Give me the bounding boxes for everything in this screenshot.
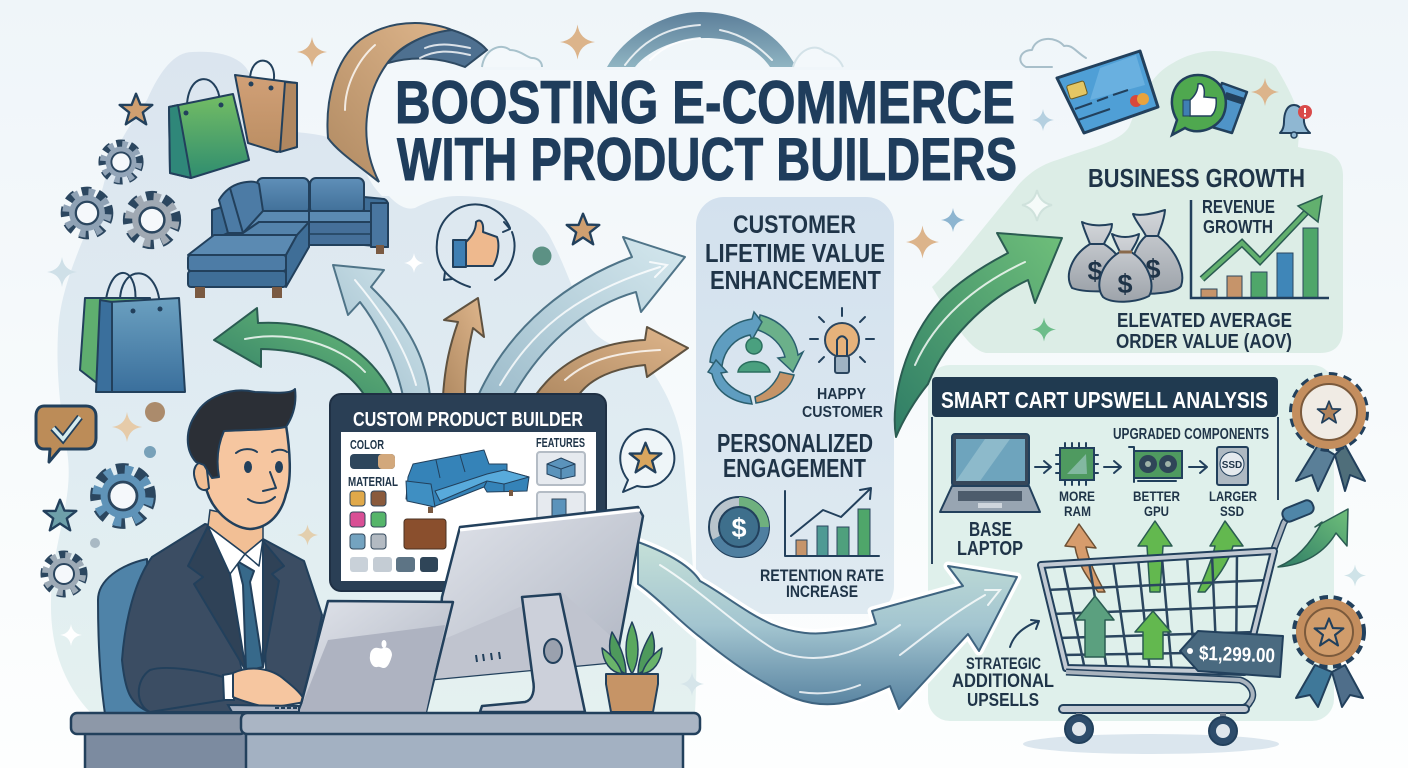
icon: money bags: $ — [1145, 254, 1161, 284]
sofa seats — [243, 211, 309, 233]
arm and hand — [139, 668, 225, 712]
icon: money bags: $ — [1117, 269, 1133, 299]
icon: ram chip — [1056, 443, 1098, 485]
label: revenue growth: GROWTH — [1203, 217, 1273, 237]
arrow: green left — [214, 308, 393, 396]
heading: custom product builder: CUSTOM PRODUCT BUILDER — [353, 409, 583, 431]
sparkle: white by thumb icon — [404, 253, 424, 273]
heading: customer lifetime value enhancement: LIFETIME VALUE — [705, 238, 885, 268]
flowing arrow: builder to cart — [638, 542, 1017, 709]
panel: customer lifetime value — [696, 197, 894, 614]
icon: big blue gear — [96, 469, 150, 523]
arrow: big green to business growth — [895, 233, 1062, 437]
label: more ram: MORE — [1059, 488, 1095, 504]
sparkle: white left of man — [60, 624, 82, 646]
label: better gpu — [1133, 488, 1180, 519]
suit — [122, 524, 322, 712]
material swatches — [350, 491, 446, 572]
label: upgraded components: UPGRADED COMPONENTS — [1113, 426, 1269, 443]
icon: star by thumb — [567, 214, 599, 244]
sparkle: outlined white — [1022, 190, 1052, 221]
decorative arch right — [607, 12, 796, 67]
lapels — [188, 526, 246, 671]
label: larger ssd: LARGER — [1209, 488, 1257, 504]
sparkle: blue near card — [1032, 109, 1054, 131]
sparkle: green — [1032, 318, 1056, 342]
label: larger ssd — [1209, 488, 1257, 519]
label: material: MATERIAL — [348, 474, 398, 489]
label: larger ssd: SSD — [1220, 503, 1244, 519]
icon: grey gear — [45, 555, 83, 593]
hair — [188, 389, 295, 478]
dot: blue — [144, 446, 156, 458]
color toggle — [350, 454, 395, 469]
ear — [194, 462, 209, 490]
price tag — [1180, 631, 1283, 677]
cloud outline near title left — [482, 47, 542, 67]
decorative arch left — [327, 23, 487, 182]
header bar — [932, 377, 1278, 417]
title: WITH PRODUCT BUILDERS — [397, 126, 1017, 193]
sparkle: right of cart — [1344, 564, 1366, 586]
heading: personalized engagement — [717, 428, 873, 483]
sofa middle seat — [214, 222, 309, 236]
arrow: tan right — [535, 327, 688, 396]
label: better gpu: BETTER — [1133, 488, 1180, 504]
feature box: accessory — [537, 492, 585, 522]
panel: smart cart background — [928, 365, 1334, 721]
icon: money bags: $ — [1087, 256, 1103, 286]
panel: smart cart upsell analysis — [932, 377, 1315, 754]
sparkle: tan left of man — [112, 412, 142, 442]
icon: green shopping bag — [169, 79, 249, 178]
arrow: tan up — [443, 298, 484, 396]
sofa back cushions — [257, 178, 309, 214]
label: revenue growth — [1202, 197, 1275, 237]
sparkle: tan centre right — [906, 226, 939, 258]
tie — [237, 561, 263, 671]
heading: smart cart upsell analysis: SMART CART UPSWELL ANALYSIS — [941, 387, 1268, 413]
icon: laptop — [228, 601, 453, 712]
icon: desk — [71, 713, 700, 768]
arrows rising out of cart — [1065, 521, 1243, 592]
sparkle: tan right of arch — [560, 24, 595, 60]
dot: tan — [145, 402, 165, 422]
sparkle: pale near plant — [680, 672, 704, 696]
heading: business growth: BUSINESS GROWTH — [1088, 163, 1305, 193]
arrow: laptop to ram — [1035, 461, 1051, 473]
title: BOOSTING E-COMMERCE — [395, 69, 1015, 136]
icon: dollar coin donut — [709, 497, 769, 557]
icon: dollar coin donut: $ — [731, 513, 747, 543]
icon: thumbs up speech bubble — [1172, 75, 1247, 135]
arrow: upsell pointer — [1010, 620, 1039, 647]
icon: teal star — [44, 500, 76, 530]
icon: bottom award rosette — [1296, 599, 1363, 707]
icon: blue and green shopping bags — [80, 273, 185, 392]
title — [395, 69, 1017, 193]
arrow: gpu to ssd — [1189, 461, 1207, 473]
label: strategic additional upsells — [952, 654, 1054, 710]
arrow: green right of cart — [1278, 509, 1348, 567]
icon: gears upper left — [66, 144, 176, 244]
icon: credit card — [1057, 51, 1158, 133]
label: base laptop: BASE — [969, 519, 1012, 541]
shirt collar — [208, 526, 263, 574]
label: retention rate increase: INCREASE — [786, 582, 858, 601]
label: strategic additional upsells: ADDITIONAL — [952, 671, 1054, 692]
icon: potted plant — [602, 622, 662, 712]
title halo — [358, 70, 1030, 196]
sparkle: tan top right — [1251, 78, 1279, 106]
icon: speech bubble with star — [620, 429, 674, 492]
label: strategic additional upsells: UPSELLS — [967, 690, 1039, 710]
figure: man in suit — [122, 389, 322, 712]
label: happy customer: HAPPY — [817, 386, 866, 403]
icon: ssd — [1217, 447, 1248, 485]
panel: custom product builder screen — [330, 394, 606, 591]
label: strategic additional upsells: STRATEGIC — [966, 654, 1041, 673]
heading: personalized engagement: ENGAGEMENT — [723, 453, 866, 483]
icon: top award rosette — [1293, 376, 1365, 491]
label: more ram: RAM — [1064, 503, 1091, 519]
icon: notification bell — [1280, 105, 1312, 138]
price tag: $1,299.00 — [1199, 643, 1275, 667]
label: happy customer — [802, 386, 883, 421]
sparkle: tan left of arch — [297, 37, 327, 67]
cloud outline top right — [1020, 39, 1086, 67]
icon: base laptop — [940, 434, 1040, 512]
sparkle: tan near screen — [297, 524, 318, 546]
icon: tan shopping bag — [235, 61, 297, 152]
arrow: ram to gpu — [1104, 461, 1121, 473]
label: more ram — [1059, 488, 1095, 519]
chart: retention rate — [785, 488, 879, 556]
icon: light bulb — [810, 308, 874, 373]
background blob: left scene — [51, 52, 696, 712]
label: elevated average order value: ELEVATED AVERAGE — [1117, 310, 1292, 332]
label: happy customer: CUSTOMER — [802, 404, 883, 421]
sofa right arm — [364, 197, 388, 247]
face — [203, 425, 290, 529]
label: elevated average order value: ORDER VALUE (AOV) — [1116, 331, 1292, 353]
icon: shopping cart — [1023, 499, 1315, 754]
heading: customer lifetime value enhancement: CUSTOMER — [733, 211, 856, 239]
label: base laptop — [957, 519, 1023, 560]
label: better gpu: GPU — [1144, 503, 1169, 519]
chart: revenue growth — [1191, 196, 1329, 298]
arrow: light blue up-left — [333, 265, 430, 396]
arrow: big light blue right — [478, 237, 685, 396]
icon: sectional sofa — [188, 178, 388, 298]
icon: gpu — [1129, 447, 1182, 482]
icon: blue sofa on screen — [406, 450, 529, 513]
dot: grey — [90, 538, 100, 548]
heading: customer lifetime value enhancement: ENHANCEMENT — [710, 265, 881, 295]
icon: desktop monitor — [435, 507, 643, 712]
background blob: business growth — [932, 51, 1343, 353]
cloud outline near title right — [793, 48, 843, 67]
label: retention rate increase: RETENTION RATE — [760, 566, 884, 585]
label: revenue growth: REVENUE — [1202, 197, 1275, 217]
heading: customer lifetime value enhancement — [705, 211, 885, 295]
label: retention rate increase — [760, 566, 884, 601]
neck — [208, 510, 263, 554]
icon: sphere — [532, 246, 552, 266]
sofa left side — [212, 207, 228, 240]
label: color: COLOR — [350, 437, 384, 452]
shirt — [208, 527, 266, 675]
heading: personalized engagement: PERSONALIZED — [717, 428, 873, 458]
sparkle: blue centre right — [941, 208, 965, 232]
sofa chaise — [188, 235, 297, 255]
panel: business growth — [1069, 163, 1329, 353]
label: base laptop: LAPTOP — [957, 538, 1023, 560]
feature box: storage — [537, 452, 585, 485]
icon: star upper left — [120, 94, 152, 124]
eyes and smile — [236, 449, 287, 503]
label: features: FEATURES — [536, 435, 585, 450]
icon: thumbs up in cycle — [437, 204, 515, 287]
icon: customer cycle — [708, 312, 803, 404]
icon: check bubble — [36, 406, 96, 462]
sparkle: pale blue left — [47, 257, 77, 287]
icon: ssd: SSD — [1222, 460, 1242, 471]
label: elevated average order value — [1116, 310, 1292, 353]
figure: office chair — [98, 559, 150, 714]
icon: money bags — [1069, 210, 1182, 302]
